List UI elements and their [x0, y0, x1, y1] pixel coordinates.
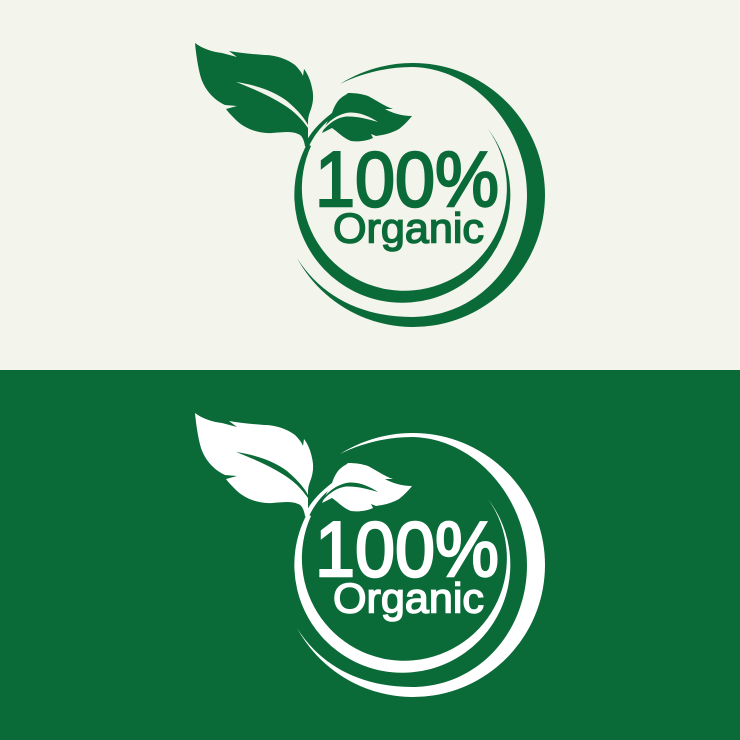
icon: leaf vein, small leaf	[320, 483, 378, 504]
icon: leaf vein, large leaf	[236, 82, 312, 134]
text: 100%: 100%	[315, 135, 499, 223]
icon: leaf vein, large leaf	[236, 452, 312, 504]
text: Organic: Organic	[333, 204, 484, 252]
text: Organic: Organic	[333, 574, 484, 622]
icon: large leaf	[195, 43, 313, 150]
panel: green background	[0, 370, 740, 740]
inner ring	[294, 129, 510, 303]
text: 100%: 100%	[315, 505, 499, 593]
outer crescent	[297, 63, 545, 327]
inner ring	[294, 499, 510, 673]
icon: stem	[305, 483, 334, 516]
outer crescent	[297, 433, 545, 697]
logo: white on green	[195, 413, 545, 697]
icon: small leaf	[322, 463, 412, 511]
icon: leaf vein, small leaf	[320, 113, 378, 134]
logo: green on light	[195, 43, 545, 327]
panel: light background	[0, 0, 740, 370]
icon: small leaf	[322, 93, 412, 141]
icon: stem	[305, 113, 334, 146]
icon: large leaf	[195, 413, 313, 520]
